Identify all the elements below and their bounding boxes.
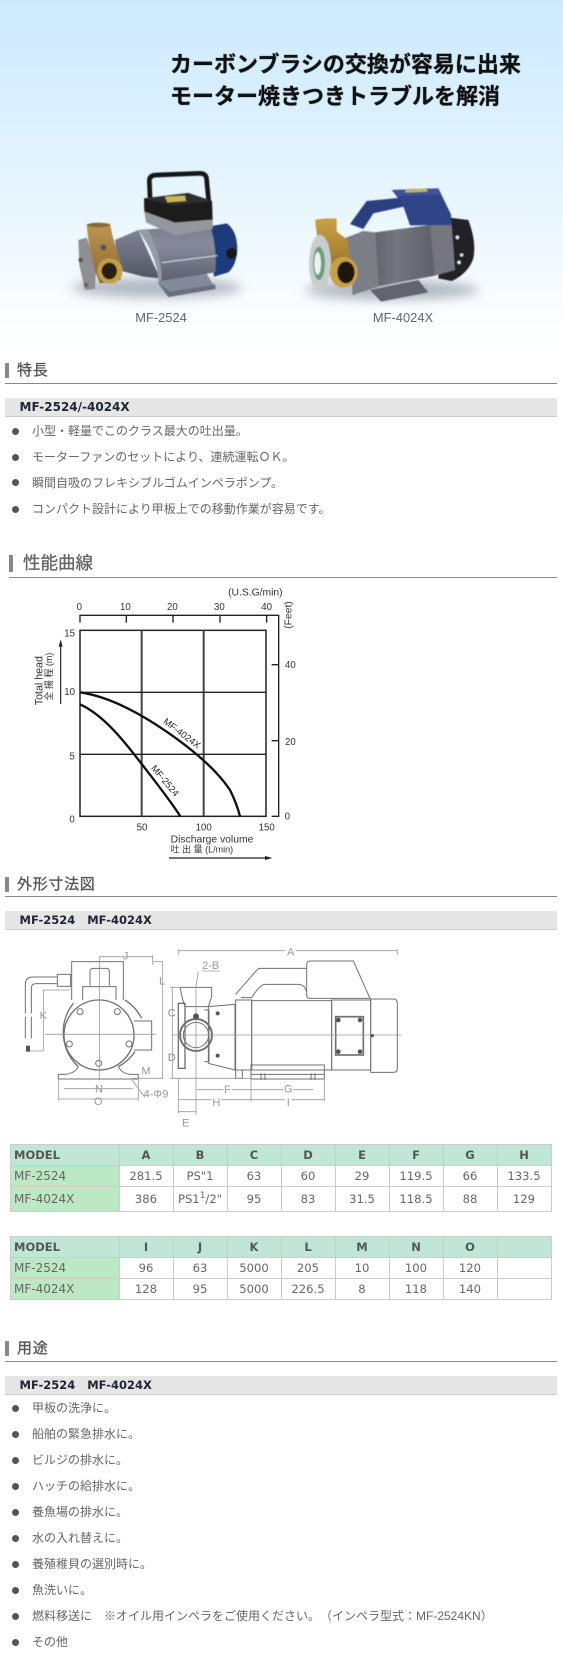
axis labels: 吐 出 量 (L/min) xyxy=(171,843,233,854)
table: dimensions A-H: 88 xyxy=(463,1192,477,1206)
title xyxy=(170,52,521,109)
table: dimensions A-H: 60 xyxy=(301,1169,315,1183)
table: dimensions A-H: C xyxy=(250,1148,258,1162)
section heading: dimensions xyxy=(5,876,557,897)
dimension letters: L xyxy=(159,975,165,987)
table: dimensions I-O: 10 xyxy=(355,1261,369,1275)
table: dimensions A-H: 118.5 xyxy=(399,1192,433,1206)
applications list: 養魚場の排水に。 xyxy=(32,1505,128,1519)
table: dimensions A-H: MF-4024X xyxy=(14,1192,74,1206)
table: dimensions A-H: 129 xyxy=(513,1192,535,1206)
table: dimensions I-O: 128 xyxy=(135,1282,157,1296)
table: dimensions A-H: E xyxy=(358,1148,366,1162)
table: dimensions I-O: MODEL xyxy=(14,1240,60,1254)
table: dimensions A-H: 66 xyxy=(463,1169,477,1183)
table: dimensions I-O: 5000 xyxy=(239,1282,269,1296)
axis labels: Total head xyxy=(34,656,46,705)
dimension letters: C xyxy=(168,1007,176,1019)
axis labels: 10 xyxy=(64,687,75,698)
dimension letters: I xyxy=(287,1097,290,1109)
axis labels xyxy=(34,588,296,854)
pump photo: MF-2524 xyxy=(70,170,244,304)
dimension letters: M xyxy=(141,1065,151,1077)
dimension letters: 2-B xyxy=(202,960,219,972)
table: dimensions A-H: PS11/2" xyxy=(178,1191,222,1206)
table: dimensions A-H: 133.5 xyxy=(507,1169,541,1183)
applications list: 水の入れ替えに。 xyxy=(32,1531,128,1545)
table: dimensions I-O xyxy=(10,1236,552,1300)
dimension letters: F xyxy=(224,1084,231,1096)
dimension letters xyxy=(168,946,296,1109)
dimension letters: C xyxy=(168,1007,176,1019)
dimension drawing: side view xyxy=(168,946,402,1115)
table: dimensions A-H: 386 xyxy=(135,1192,157,1206)
table: dimensions A-H: PS"1 xyxy=(186,1169,214,1183)
table: dimensions I-O: L xyxy=(304,1240,312,1254)
applications list: 船舶の緊急排水に。 xyxy=(32,1427,140,1441)
applications list: その他 xyxy=(32,1635,68,1649)
table: dimensions A-H: 95 xyxy=(247,1192,261,1206)
axis labels: 10 xyxy=(120,602,131,613)
dimension letters: K xyxy=(40,1010,48,1022)
section heading: applications: 用途 xyxy=(17,1340,48,1357)
table: dimensions I-O: 63 xyxy=(193,1261,207,1275)
table: dimensions I-O: 5000 xyxy=(239,1261,269,1275)
features list: モーターファンのセットにより、連続運転ＯＫ。 xyxy=(32,450,295,464)
table: dimensions I-O: I xyxy=(144,1240,148,1254)
applications list: 魚洗いに。 xyxy=(32,1583,92,1597)
curve labels: MF-2524 xyxy=(149,763,181,798)
pump label: MF-4024X: MF-4024X xyxy=(373,310,433,325)
table: dimensions I-O: 140 xyxy=(459,1282,481,1296)
axis labels: 5 xyxy=(69,751,75,762)
table: dimensions I-O: M xyxy=(356,1240,368,1254)
table: dimensions I-O: 120 xyxy=(459,1261,481,1275)
section heading: applications xyxy=(5,1340,557,1362)
band: MF-2524/-4024X xyxy=(5,398,557,417)
section heading: performance curve xyxy=(9,553,557,578)
dimension letters xyxy=(40,951,189,1129)
dimension letters: D xyxy=(168,1052,176,1064)
table: dimensions I-O: 100 xyxy=(405,1261,427,1275)
axis labels: 50 xyxy=(137,822,147,833)
dimension letters: A xyxy=(287,946,295,958)
axis labels: 15 xyxy=(64,628,75,639)
applications list: 養殖稚貝の選別時に。 xyxy=(32,1557,152,1571)
band: dimensions models xyxy=(5,911,557,930)
axis labels: 20 xyxy=(167,602,178,613)
table: dimensions A-H: 119.5 xyxy=(399,1169,433,1183)
table: dimensions A-H xyxy=(10,1144,552,1212)
axis labels: (Feet) xyxy=(283,601,294,629)
dimension drawing: front view xyxy=(24,951,189,1129)
axis labels: 0 xyxy=(69,814,75,825)
features list: コンパクト設計により甲板上での移動作業が容易です。 xyxy=(32,502,331,516)
table: dimensions I-O: 96 xyxy=(139,1261,153,1275)
title: カーボンブラシの交換が容易に出来 xyxy=(170,52,521,77)
table: dimensions A-H: 281.5 xyxy=(129,1169,163,1183)
table: dimensions A-H: B xyxy=(196,1148,204,1162)
table: dimensions I-O: 8 xyxy=(358,1282,366,1296)
dimension letters: O xyxy=(94,1096,103,1108)
band: dimensions models: MF-2524 MF-4024X xyxy=(20,913,152,927)
table: dimensions A-H: 29 xyxy=(355,1169,369,1183)
dimension letters: N xyxy=(95,1084,103,1096)
table: dimensions I-O: MF-2524 xyxy=(14,1261,66,1275)
table: dimensions A-H: MF-2524 xyxy=(14,1169,66,1183)
dimension letters: E xyxy=(182,1117,189,1129)
table: dimensions A-H: 83 xyxy=(301,1192,315,1206)
table: dimensions I-O: 95 xyxy=(193,1282,207,1296)
applications list: 燃料移送に ※オイル用インペラをご使用ください。（インペラ型式：MF-2524KN） xyxy=(32,1609,493,1623)
axis labels: 30 xyxy=(214,602,225,613)
axis labels: 100 xyxy=(196,822,212,833)
axis labels: 0 xyxy=(77,602,82,613)
curve labels xyxy=(149,716,203,798)
table: dimensions A-H: D xyxy=(303,1148,313,1162)
band: application models: MF-2524 MF-4024X xyxy=(20,1378,152,1392)
section heading: features xyxy=(5,362,557,384)
table: dimensions A-H: 63 xyxy=(247,1169,261,1183)
dimension letters: H xyxy=(212,1097,220,1109)
table: dimensions I-O: 226.5 xyxy=(291,1282,325,1296)
table: dimensions A-H: A xyxy=(142,1148,150,1162)
axis arrows xyxy=(59,639,272,860)
title: モーター焼きつきトラブルを解消 xyxy=(170,84,500,109)
pump label: MF-2524: MF-2524 xyxy=(135,310,187,325)
table: dimensions I-O: MF-4024X xyxy=(14,1282,74,1296)
performance chart xyxy=(34,588,296,860)
applications list: ビルジの排水に。 xyxy=(32,1453,128,1467)
axis labels: 40 xyxy=(261,602,272,613)
section heading: features: 特長 xyxy=(17,362,48,379)
features list: 瞬間自吸のフレキシブルゴムインペラポンプ。 xyxy=(32,476,283,490)
axis labels: (U.S.G/min) xyxy=(228,588,283,599)
table: dimensions A-H: F xyxy=(412,1148,420,1162)
table: dimensions I-O: 205 xyxy=(297,1261,319,1275)
dimension letters: J xyxy=(123,951,128,963)
table: dimensions A-H: 31.5 xyxy=(349,1192,375,1206)
table: dimensions A-H: G xyxy=(465,1148,475,1162)
table: dimensions A-H: H xyxy=(519,1148,529,1162)
applications list: 甲板の洗浄に。 xyxy=(32,1401,116,1415)
applications list xyxy=(12,1401,493,1649)
table: dimensions I-O: N xyxy=(411,1240,421,1254)
band: application models xyxy=(5,1376,557,1395)
applications list: ハッチの給排水に。 xyxy=(32,1479,140,1493)
table: dimensions I-O: J xyxy=(198,1240,202,1254)
axis labels: 全 揚 程 (m) xyxy=(43,653,54,701)
dimension letters: 4-Φ9 xyxy=(144,1089,168,1101)
pump photo: MF-4024X xyxy=(303,188,480,306)
axis labels: 150 xyxy=(259,822,275,833)
dimension letters: D xyxy=(168,1052,176,1064)
hero background xyxy=(0,0,563,358)
section heading: performance curve: 性能曲線 xyxy=(23,553,93,573)
axis labels: Discharge volume xyxy=(171,834,254,845)
dimension letters: G xyxy=(284,1083,293,1095)
axis labels: 40 xyxy=(285,660,296,671)
curve: MF-2524 xyxy=(80,704,180,816)
table: dimensions I-O: O xyxy=(465,1240,475,1254)
curve labels: MF-4024X xyxy=(161,716,203,751)
axis labels: 20 xyxy=(285,737,296,748)
table: dimensions I-O: K xyxy=(250,1240,258,1254)
section heading: dimensions: 外形寸法図 xyxy=(17,876,96,893)
features list: 小型・軽量でこのクラス最大の吐出量。 xyxy=(32,424,248,438)
table: dimensions A-H: MODEL xyxy=(14,1148,60,1162)
curve: MF-4024X xyxy=(80,692,240,816)
axis labels: 0 xyxy=(285,811,290,822)
features list xyxy=(12,424,331,516)
band: MF-2524/-4024X: MF-2524/-4024X xyxy=(20,400,130,414)
table: dimensions I-O: 118 xyxy=(405,1282,427,1296)
